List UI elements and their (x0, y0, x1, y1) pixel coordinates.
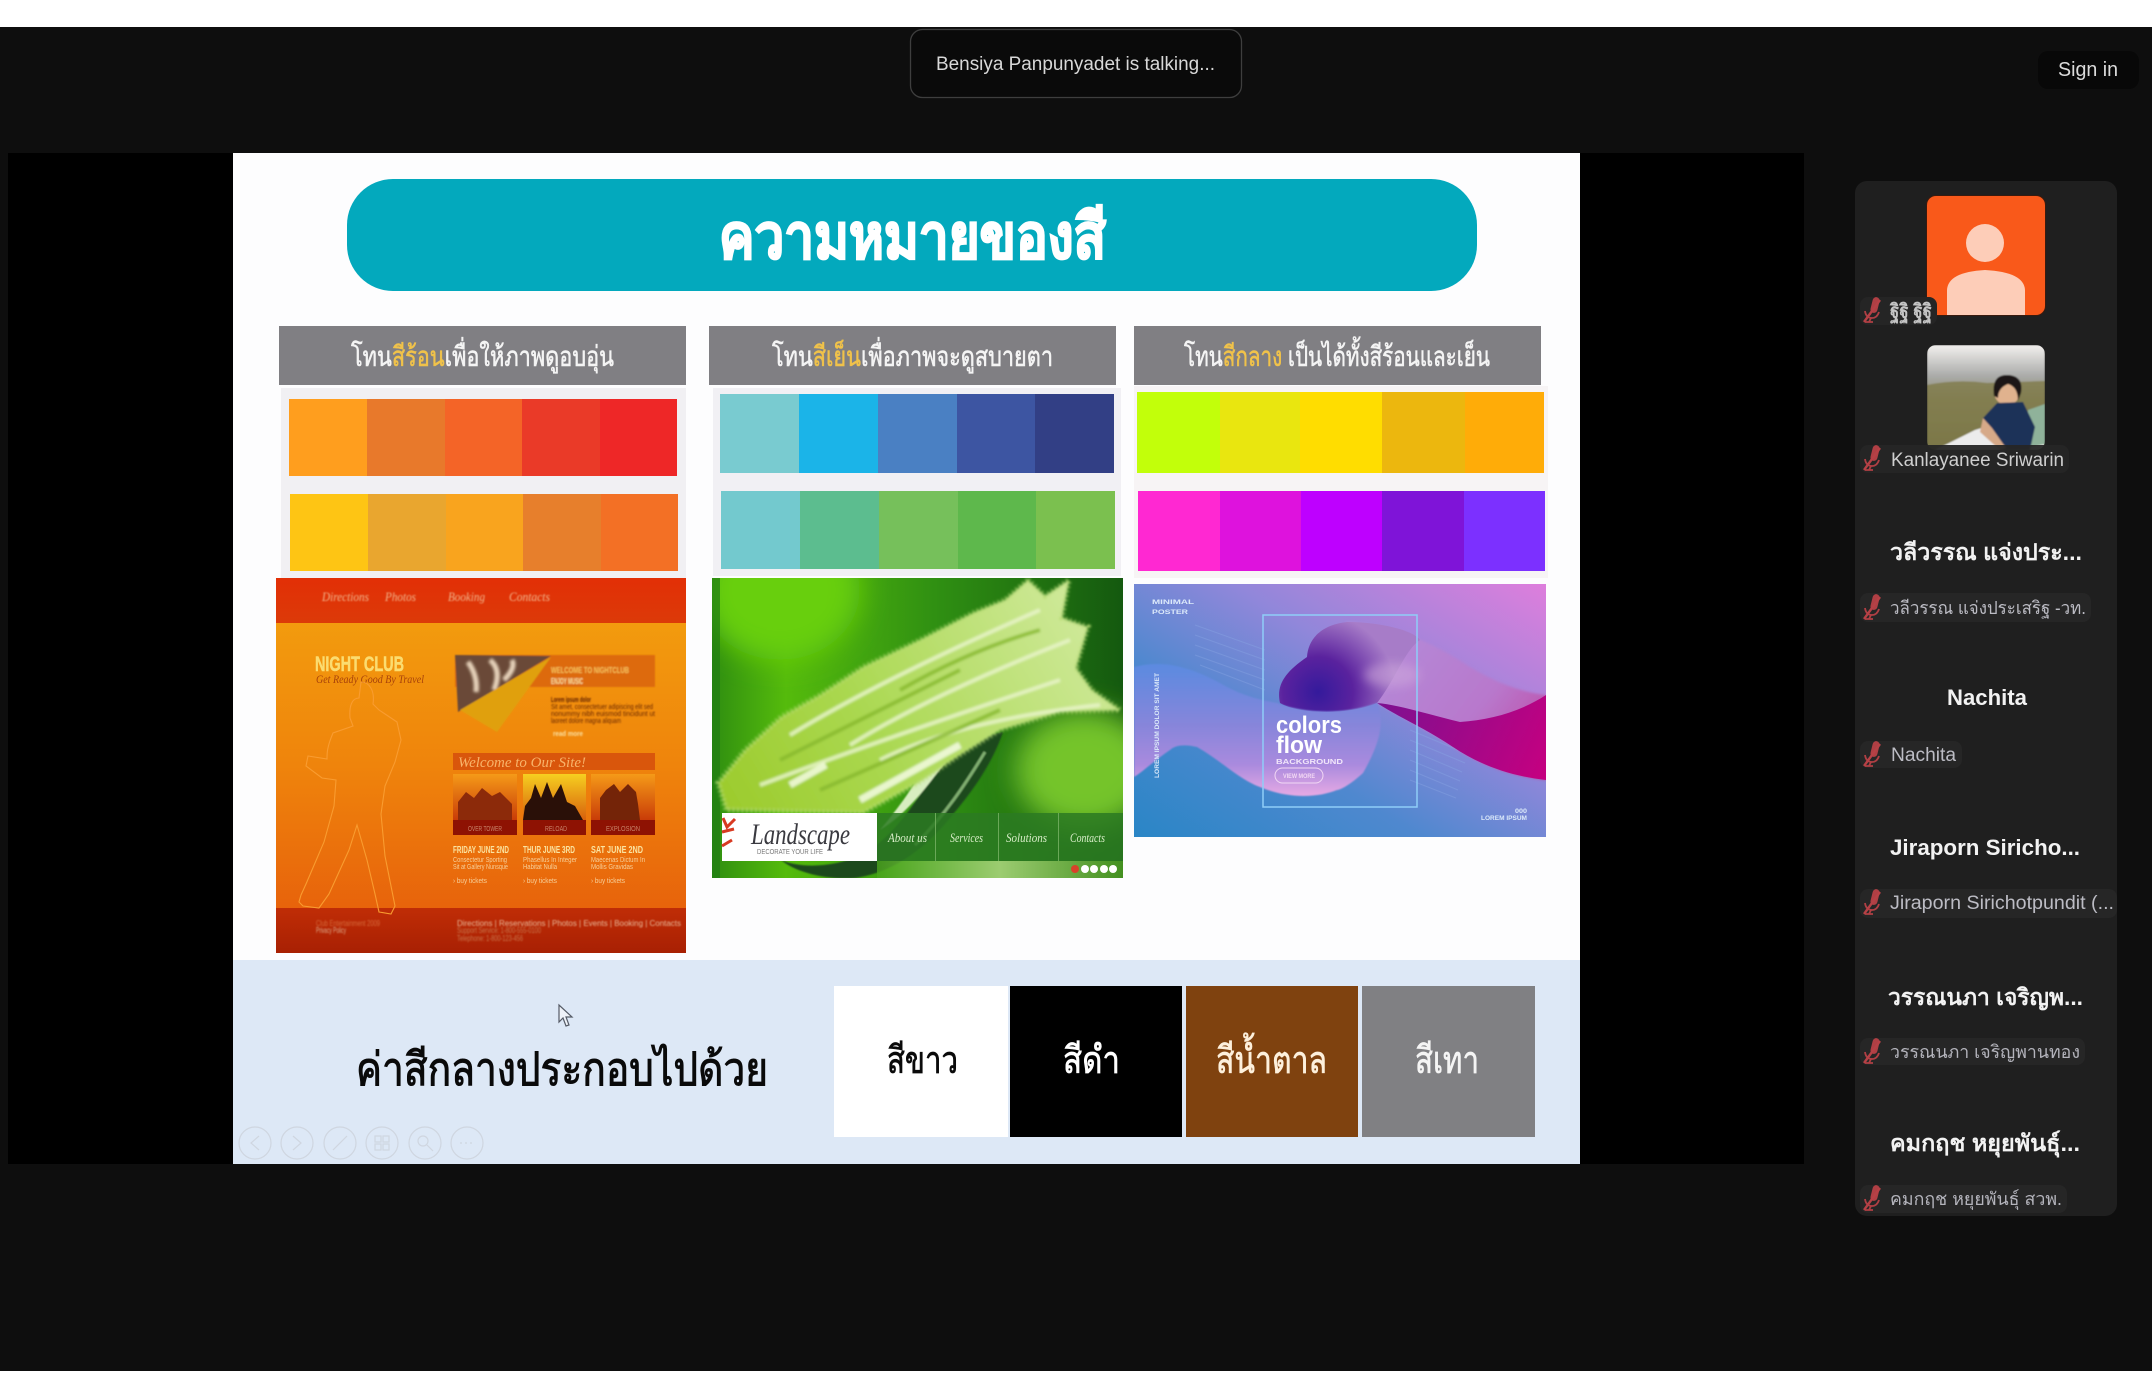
participant 1: orange avatar (1860, 195, 2046, 325)
slide (233, 153, 1580, 1164)
welcome box with folded photo: read more (553, 731, 583, 738)
website nav band: Solutions (1006, 830, 1047, 845)
participant 5: Jiraporn Sirichotpundit (... (1890, 893, 2114, 914)
slider strip with dots (877, 861, 1123, 878)
image: colors flow poster: BACKGROUND (1276, 759, 1343, 766)
swatch: white (834, 986, 1008, 1137)
event dates: THUR JUNE 3RD (523, 845, 575, 856)
participant 6 (1860, 984, 2085, 1065)
welcome box with folded photo: Lorem ipsum dolor (551, 697, 591, 704)
strip heading: ค่าสีกลางประกอบไปด้วย (356, 1043, 768, 1095)
website nav text: Contacts (509, 589, 550, 604)
image: night club website: Get Ready Good By Travel (316, 672, 425, 686)
palette panel: warm swatches (281, 388, 686, 578)
event dates: Maecenas Dictum In (591, 857, 645, 864)
poster small texts: 000 (1515, 809, 1528, 815)
website footer text (316, 919, 681, 943)
neutral colours strip (233, 960, 1580, 1164)
image: colors flow poster: flow (1276, 732, 1322, 759)
slide title pill: ความหมายของสี (719, 203, 1106, 272)
website nav text: Photos (384, 589, 416, 604)
swatch: grey (1362, 986, 1535, 1137)
participants panel (1855, 181, 2117, 1216)
poster small texts: LOREM IPSUM DOLOR SIT AMET (1155, 673, 1161, 778)
event dates: SAT JUNE 2ND (591, 845, 643, 856)
event photo 3 (591, 774, 655, 835)
column header: neutral tones (1134, 326, 1541, 385)
website footer text: Support Service: 1-800-555-0100 (457, 926, 541, 935)
event dates: Habitat Nulla (523, 864, 557, 871)
poster heading: colors (1276, 712, 1342, 739)
swatch: black (1010, 986, 1182, 1137)
event dates (453, 845, 645, 885)
website footer text: Privacy Policy (316, 926, 346, 935)
participant 3 (1860, 539, 2091, 622)
poster small texts: LOREM IPSUM (1481, 816, 1527, 822)
dancer outline (299, 682, 401, 914)
event photo 3: EXPLOSION (606, 826, 640, 833)
participant 2: photo (1860, 345, 2069, 473)
poster button (1275, 768, 1323, 783)
welcome box with folded photo: laoreet dolore magna aliquam (551, 718, 621, 725)
event dates: Sit at Gallery Nunsque (453, 864, 508, 871)
poster small texts: MINIMAL (1152, 600, 1195, 606)
participant 1: orange avatar: ฐิฐิ ฐิฐิ (1889, 301, 1932, 325)
slideshow controls (239, 1127, 483, 1159)
flowing ribbon right (1376, 640, 1546, 782)
participant 2: photo: Kanlayanee Sriwarin (1891, 450, 2064, 471)
participant 3: วลีวรรณ แจ่งประเสริฐ -วท. (1890, 598, 2086, 619)
swatch: brown: สีน้ำตาล (1216, 1032, 1327, 1082)
participant 4: Nachita (1891, 745, 1956, 766)
participant 5 (1860, 835, 2117, 918)
event dates: › buy tickets (523, 878, 557, 885)
website nav band (877, 813, 1123, 861)
welcome box with folded photo: ENJOY MUSIC (551, 677, 583, 686)
website nav band: Services (950, 830, 983, 845)
welcome box with folded photo: nonummy nibh euismod tincidunt ut (551, 711, 655, 718)
website footer text: Directions | Reservations | Photos | Events | Booking | Contacts (457, 919, 681, 928)
participant 5: Jiraporn Siricho... (1890, 835, 2080, 860)
poster button: VIEW MORE (1283, 774, 1315, 780)
website nav text: Booking (448, 589, 485, 604)
slide title pill (347, 179, 1477, 291)
leaf stem and water drop (781, 732, 1003, 878)
hatched lines (1195, 625, 1470, 798)
participant 7: คมกฤช หยุยพันธุ์ สวพ. (1890, 1189, 2062, 1210)
toast: who is talking: Bensiya Panpunyadet is talking... (936, 54, 1215, 75)
palette panel: cool swatches (713, 388, 1121, 576)
landscape logo box: DECORATE YOUR LIFE (757, 849, 823, 856)
poster small texts (1152, 600, 1528, 822)
event dates: FRIDAY JUNE 2ND (453, 845, 509, 856)
website footer text: Club Entertainment 2009 (316, 919, 380, 928)
night club logo: NIGHT CLUB (315, 653, 404, 676)
website nav text: Directions (321, 589, 369, 604)
landscape logo box (722, 813, 877, 861)
website nav band: Contacts (1070, 830, 1105, 845)
website footer text: Telephone: 1-800-123-456 (457, 934, 523, 943)
landscape logo box: Landscape (750, 818, 850, 851)
participant 3: วลีวรรณ แจ่งประ... (1890, 539, 2082, 565)
event dates: Mollis Gravidas (591, 864, 633, 871)
event photo 1 (453, 774, 517, 835)
poster small texts: POSTER (1152, 610, 1189, 616)
swatch: black: สีดำ (1063, 1040, 1120, 1082)
image: night club website (276, 578, 686, 953)
mouse cursor (559, 1005, 572, 1026)
palette panel: neutral swatches (1134, 386, 1548, 578)
column header: cool tones (709, 326, 1116, 385)
participant 4: Nachita (1947, 685, 2028, 710)
event dates: Phasellus In Integer (523, 857, 578, 864)
column header: neutral tones: โทนสีกลาง เป็นได้ทั้งสีร้อนและเย็น (1184, 336, 1490, 372)
participant 7: คมกฤช หยุยพันธุ์... (1890, 1130, 2080, 1158)
dark blob (1279, 622, 1420, 712)
welcome box with folded photo: WELCOME TO NIGHTCLUB (551, 666, 629, 675)
welcome box with folded photo (455, 655, 655, 738)
event photo 2 (523, 774, 586, 835)
event dates: Consectetur Sporting (453, 857, 507, 864)
sign in button: Sign in (2058, 59, 2118, 81)
welcome box with folded photo: Sit amet, consectetuer adipiscing elit sed (551, 704, 653, 711)
image: green leaf website (712, 578, 1123, 878)
toast: who is talking (910, 30, 1242, 98)
event photo 2: RELOAD (545, 826, 567, 833)
poster frame (1263, 615, 1417, 807)
website nav text (322, 592, 550, 604)
participant 6: วรรณนภา เจริญพานทอง (1890, 1042, 2080, 1062)
event dates: › buy tickets (591, 878, 625, 885)
swatch: brown (1186, 986, 1358, 1137)
image: colors flow poster (1134, 584, 1546, 837)
event dates: › buy tickets (453, 878, 487, 885)
column header: cool tones: โทนสีเย็นเพื่อภาพจะดูสบายตา (772, 337, 1053, 374)
participant 7 (1860, 1130, 2080, 1213)
welcome bar (453, 753, 655, 771)
leaf body (718, 580, 1120, 813)
sign in button (2038, 51, 2139, 89)
event photo 1: OVER TOWER (468, 826, 502, 833)
column header: warm tones (279, 326, 686, 385)
flowing ribbon left (1134, 664, 1381, 796)
participant 6: วรรณนภา เจริญพ... (1888, 984, 2083, 1011)
swatch: grey: สีเทา (1415, 1040, 1479, 1082)
welcome bar: Welcome to Our Site! (458, 755, 586, 771)
participant 4 (1860, 685, 2028, 768)
swatch: white: สีขาว (887, 1040, 958, 1082)
column header: warm tones: โทนสีร้อนเพื่อให้ภาพดูอบอุ่น (351, 337, 614, 374)
website nav band: About us (887, 830, 927, 845)
